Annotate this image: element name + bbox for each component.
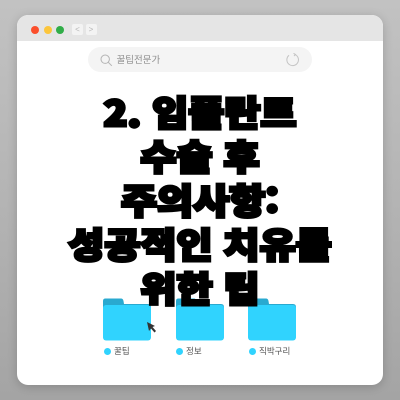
- label dot: 정보: [176, 348, 183, 355]
- window control: minimize: [44, 26, 52, 34]
- label: 꿀팁: 꿀팁: [114, 345, 130, 357]
- forward button: [86, 24, 96, 35]
- title: 수술 후: [140, 130, 260, 181]
- label dot: 직박구리: [249, 348, 256, 355]
- label: 직박구리: 직박구리: [259, 345, 290, 357]
- title: 2. 임플란트: [104, 86, 296, 137]
- icon: reload: [286, 53, 299, 66]
- label: 정보: 정보: [186, 345, 202, 357]
- forward button: >: [89, 25, 93, 34]
- title bar: [17, 15, 383, 41]
- title: 위한 팁: [140, 262, 260, 313]
- title: 주의사항:: [121, 174, 279, 225]
- folder: 꿀팁: [103, 298, 151, 340]
- search bar: [88, 47, 312, 72]
- label dot: 꿀팁: [104, 348, 111, 355]
- back button: <: [75, 25, 80, 34]
- folder: 직박구리: [248, 298, 296, 340]
- search text: 꿀팁전문가: [116, 52, 160, 66]
- back button: [72, 24, 83, 35]
- folder: 정보: [176, 298, 224, 340]
- window control: close: [31, 26, 39, 34]
- title: [66, 86, 332, 313]
- title: 성공적인 치유를: [68, 218, 332, 269]
- icon: magnifier: [100, 54, 112, 66]
- icon: mouse cursor: [147, 322, 156, 332]
- window control: maximize: [56, 26, 64, 34]
